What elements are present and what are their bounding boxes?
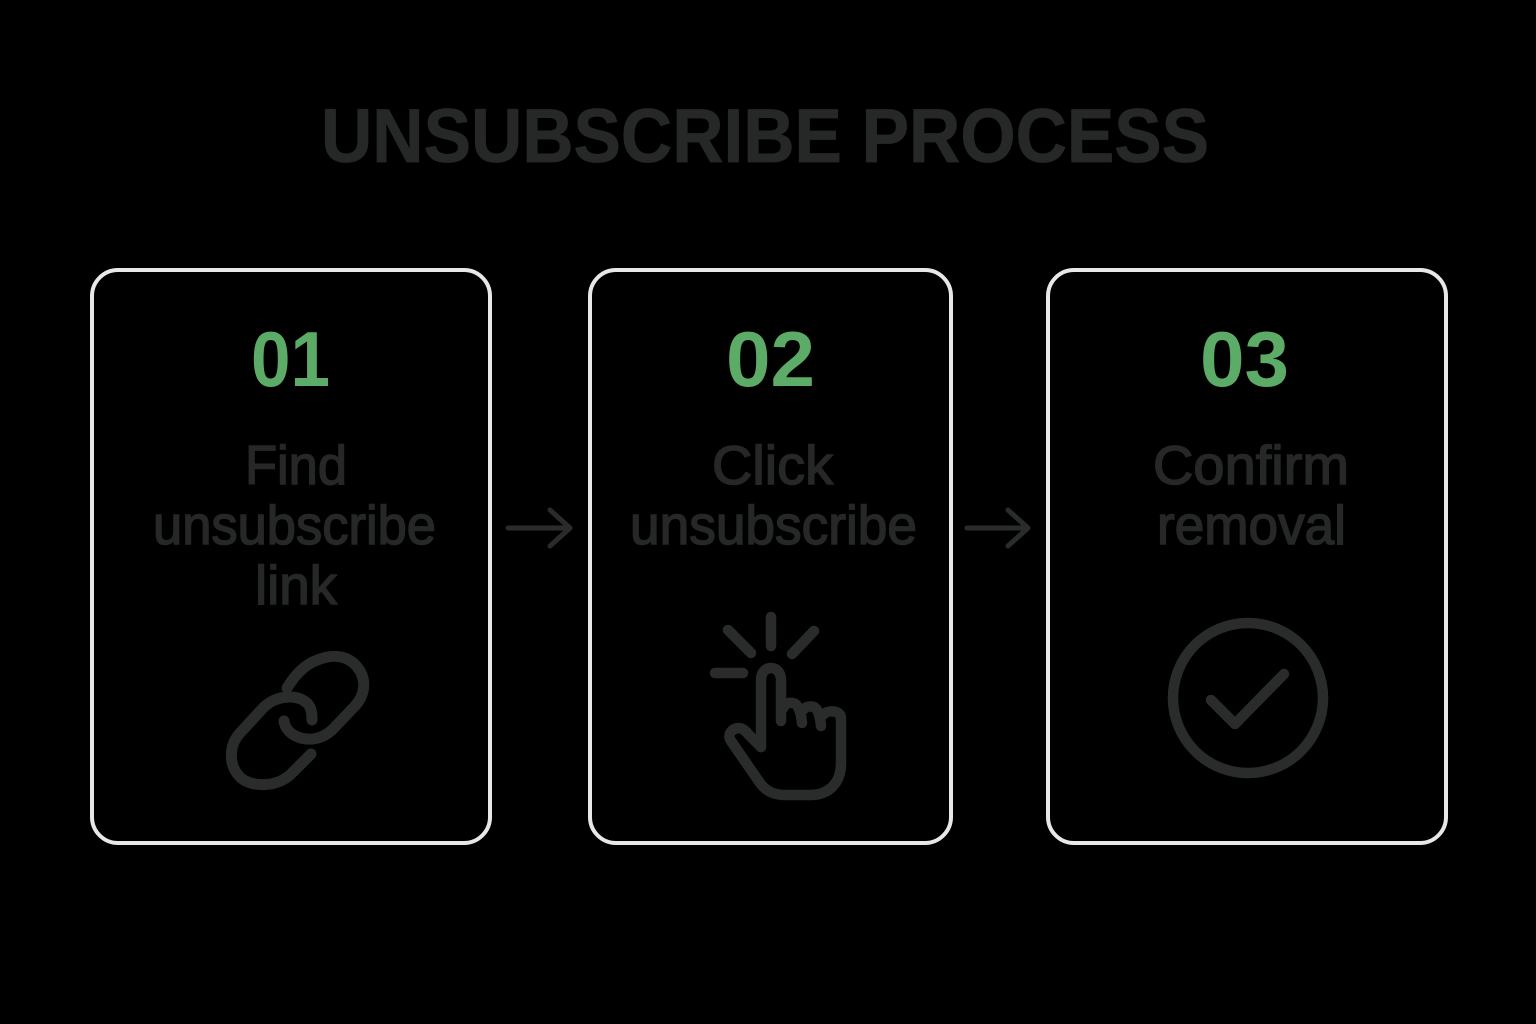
- step number 01: 01: [251, 315, 330, 403]
- panel: step 1: [92, 270, 490, 843]
- step text: confirm removal: [1153, 434, 1349, 556]
- step text: click unsubscribe: [630, 434, 917, 556]
- panel: step 3: [1048, 270, 1446, 843]
- step number 02: 02: [726, 315, 815, 403]
- step text: click unsubscribe: unsubscribe: [630, 494, 917, 556]
- step text: confirm removal: Confirm: [1153, 434, 1349, 496]
- title: UNSUBSCRIBE PROCESS: [321, 94, 1209, 179]
- card outline: step 2: [590, 270, 951, 843]
- step text: find unsubscribe link: Find: [245, 434, 347, 496]
- panel: step 2: [590, 270, 951, 843]
- step text: confirm removal: removal: [1157, 494, 1346, 556]
- step text: find unsubscribe link: [153, 434, 436, 616]
- card outline: step 1: [92, 270, 490, 843]
- step text: find unsubscribe link: unsubscribe: [153, 494, 436, 556]
- step number 03: 03: [1200, 315, 1289, 403]
- icon: check mark in circle: [1173, 623, 1323, 773]
- icon: chain link: [231, 656, 364, 785]
- step text: click unsubscribe: Click: [712, 434, 833, 496]
- arrow: step 2 to step 3: [967, 510, 1028, 546]
- card outline: step 3: [1048, 270, 1446, 843]
- arrow: step 1 to step 2: [508, 510, 570, 546]
- step text: find unsubscribe link: link: [255, 554, 337, 616]
- icon: clicking hand: [715, 617, 841, 795]
